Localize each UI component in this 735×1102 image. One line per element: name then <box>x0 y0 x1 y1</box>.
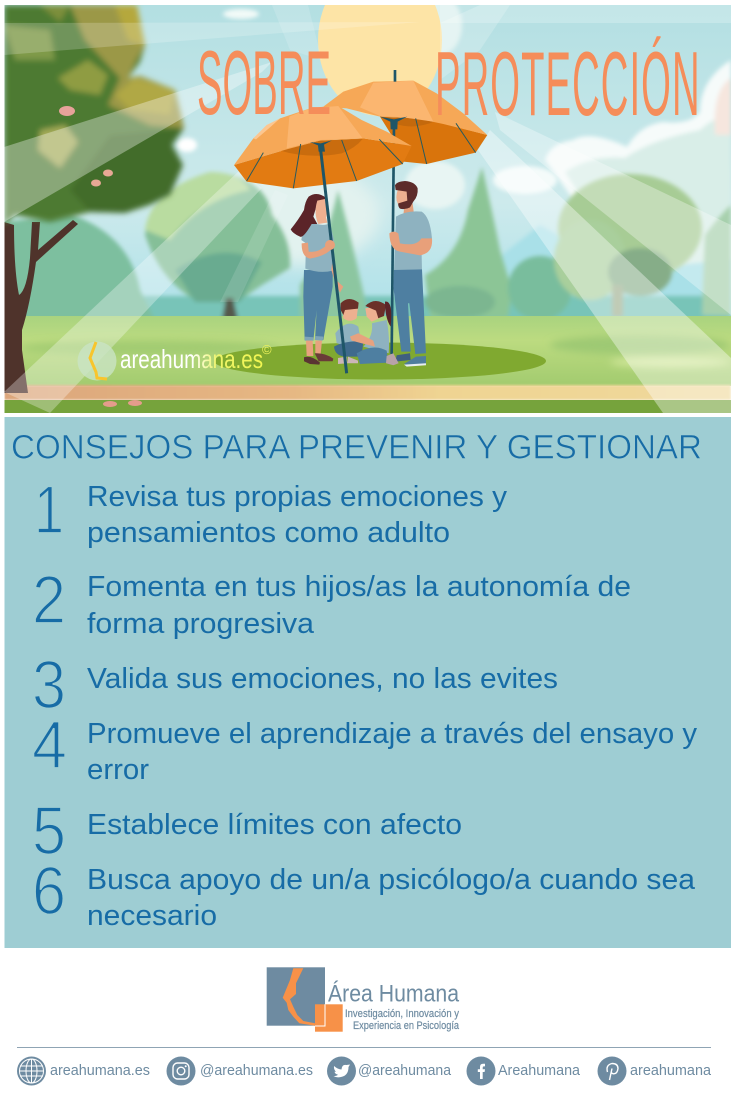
tip 6: necesario <box>87 900 217 932</box>
big cloud right <box>544 60 731 264</box>
front umbrella pole <box>310 140 347 373</box>
pinterest: areahumana <box>630 1063 712 1079</box>
tip 3 <box>32 647 558 723</box>
small clouds <box>177 0 557 209</box>
tip 1: 1 <box>34 472 64 548</box>
bottom grass <box>4 400 731 414</box>
pinterest <box>598 1056 712 1086</box>
footer logo: Experiencia en Psicología <box>353 1020 460 1032</box>
tip 3: 3 <box>32 647 66 723</box>
ground ellipse <box>214 342 546 380</box>
tip 4: 4 <box>32 707 67 783</box>
dirt path <box>4 385 731 400</box>
footer logo: Área Humana <box>328 981 460 1008</box>
website: areahumana.es <box>50 1063 150 1079</box>
tip 1: Revisa tus propias emociones y <box>87 481 508 513</box>
tip 2: Fomenta en tus hijos/as la autonomía de <box>87 571 631 603</box>
children <box>334 299 399 365</box>
footer logo <box>267 967 460 1032</box>
blossoms <box>59 106 75 116</box>
watermark logo: areahumana.es <box>120 344 263 374</box>
tip 6: Busca apoyo de un/a psicólogo/a cuando sea <box>87 864 696 896</box>
light rays <box>4 5 731 413</box>
foliage <box>4 5 184 225</box>
tip 5 <box>32 793 462 869</box>
tips panel <box>4 417 731 948</box>
distant trees <box>4 167 731 322</box>
watermark logo: © <box>262 342 272 357</box>
twitter <box>327 1056 452 1086</box>
sun <box>318 0 442 116</box>
hero illustration panel <box>4 0 731 414</box>
sky background <box>4 5 731 335</box>
twitter: @areahumana <box>358 1063 452 1079</box>
title <box>198 36 696 116</box>
pale centre sky <box>252 180 382 272</box>
left tree <box>4 5 184 393</box>
trunk <box>4 220 78 393</box>
tip 6 <box>32 853 696 932</box>
tip 1: pensamientos como adulto <box>87 517 450 549</box>
hand on pole <box>325 240 335 250</box>
title: SOBRE <box>197 32 331 134</box>
tip 3: Valida sus emociones, no las evites <box>87 663 558 695</box>
tip 2: 2 <box>32 562 66 638</box>
woman <box>291 194 343 365</box>
tip 4: Promueve el aprendizaje a través del ensayo y <box>87 718 697 750</box>
instagram <box>166 1056 313 1086</box>
tip 5: Establece límites con afecto <box>87 809 462 841</box>
back umbrella <box>323 70 487 164</box>
back umbrella pole <box>380 117 407 354</box>
tip 2: forma progresiva <box>87 608 315 640</box>
footer logo: Investigación, Innovación y <box>345 1008 459 1020</box>
tip 6: 6 <box>32 853 66 929</box>
front umbrella <box>234 105 412 188</box>
distant blue hills <box>502 226 706 294</box>
facebook: Areahumana <box>498 1063 581 1079</box>
panel heading: CONSEJOS PARA PREVENIR Y GESTIONAR <box>11 428 702 466</box>
social row <box>17 1056 712 1086</box>
watermark logo <box>78 342 272 380</box>
tip 1 <box>34 472 508 549</box>
facebook <box>466 1056 581 1086</box>
tip 4 <box>32 707 697 786</box>
website <box>17 1056 150 1086</box>
tip 4: error <box>87 754 149 786</box>
tip 5: 5 <box>32 793 66 869</box>
instagram: @areahumana.es <box>200 1063 313 1079</box>
man <box>389 181 432 367</box>
tip 2 <box>32 562 631 640</box>
grass field <box>4 316 731 386</box>
title: PROTECCIÓN <box>435 33 700 135</box>
